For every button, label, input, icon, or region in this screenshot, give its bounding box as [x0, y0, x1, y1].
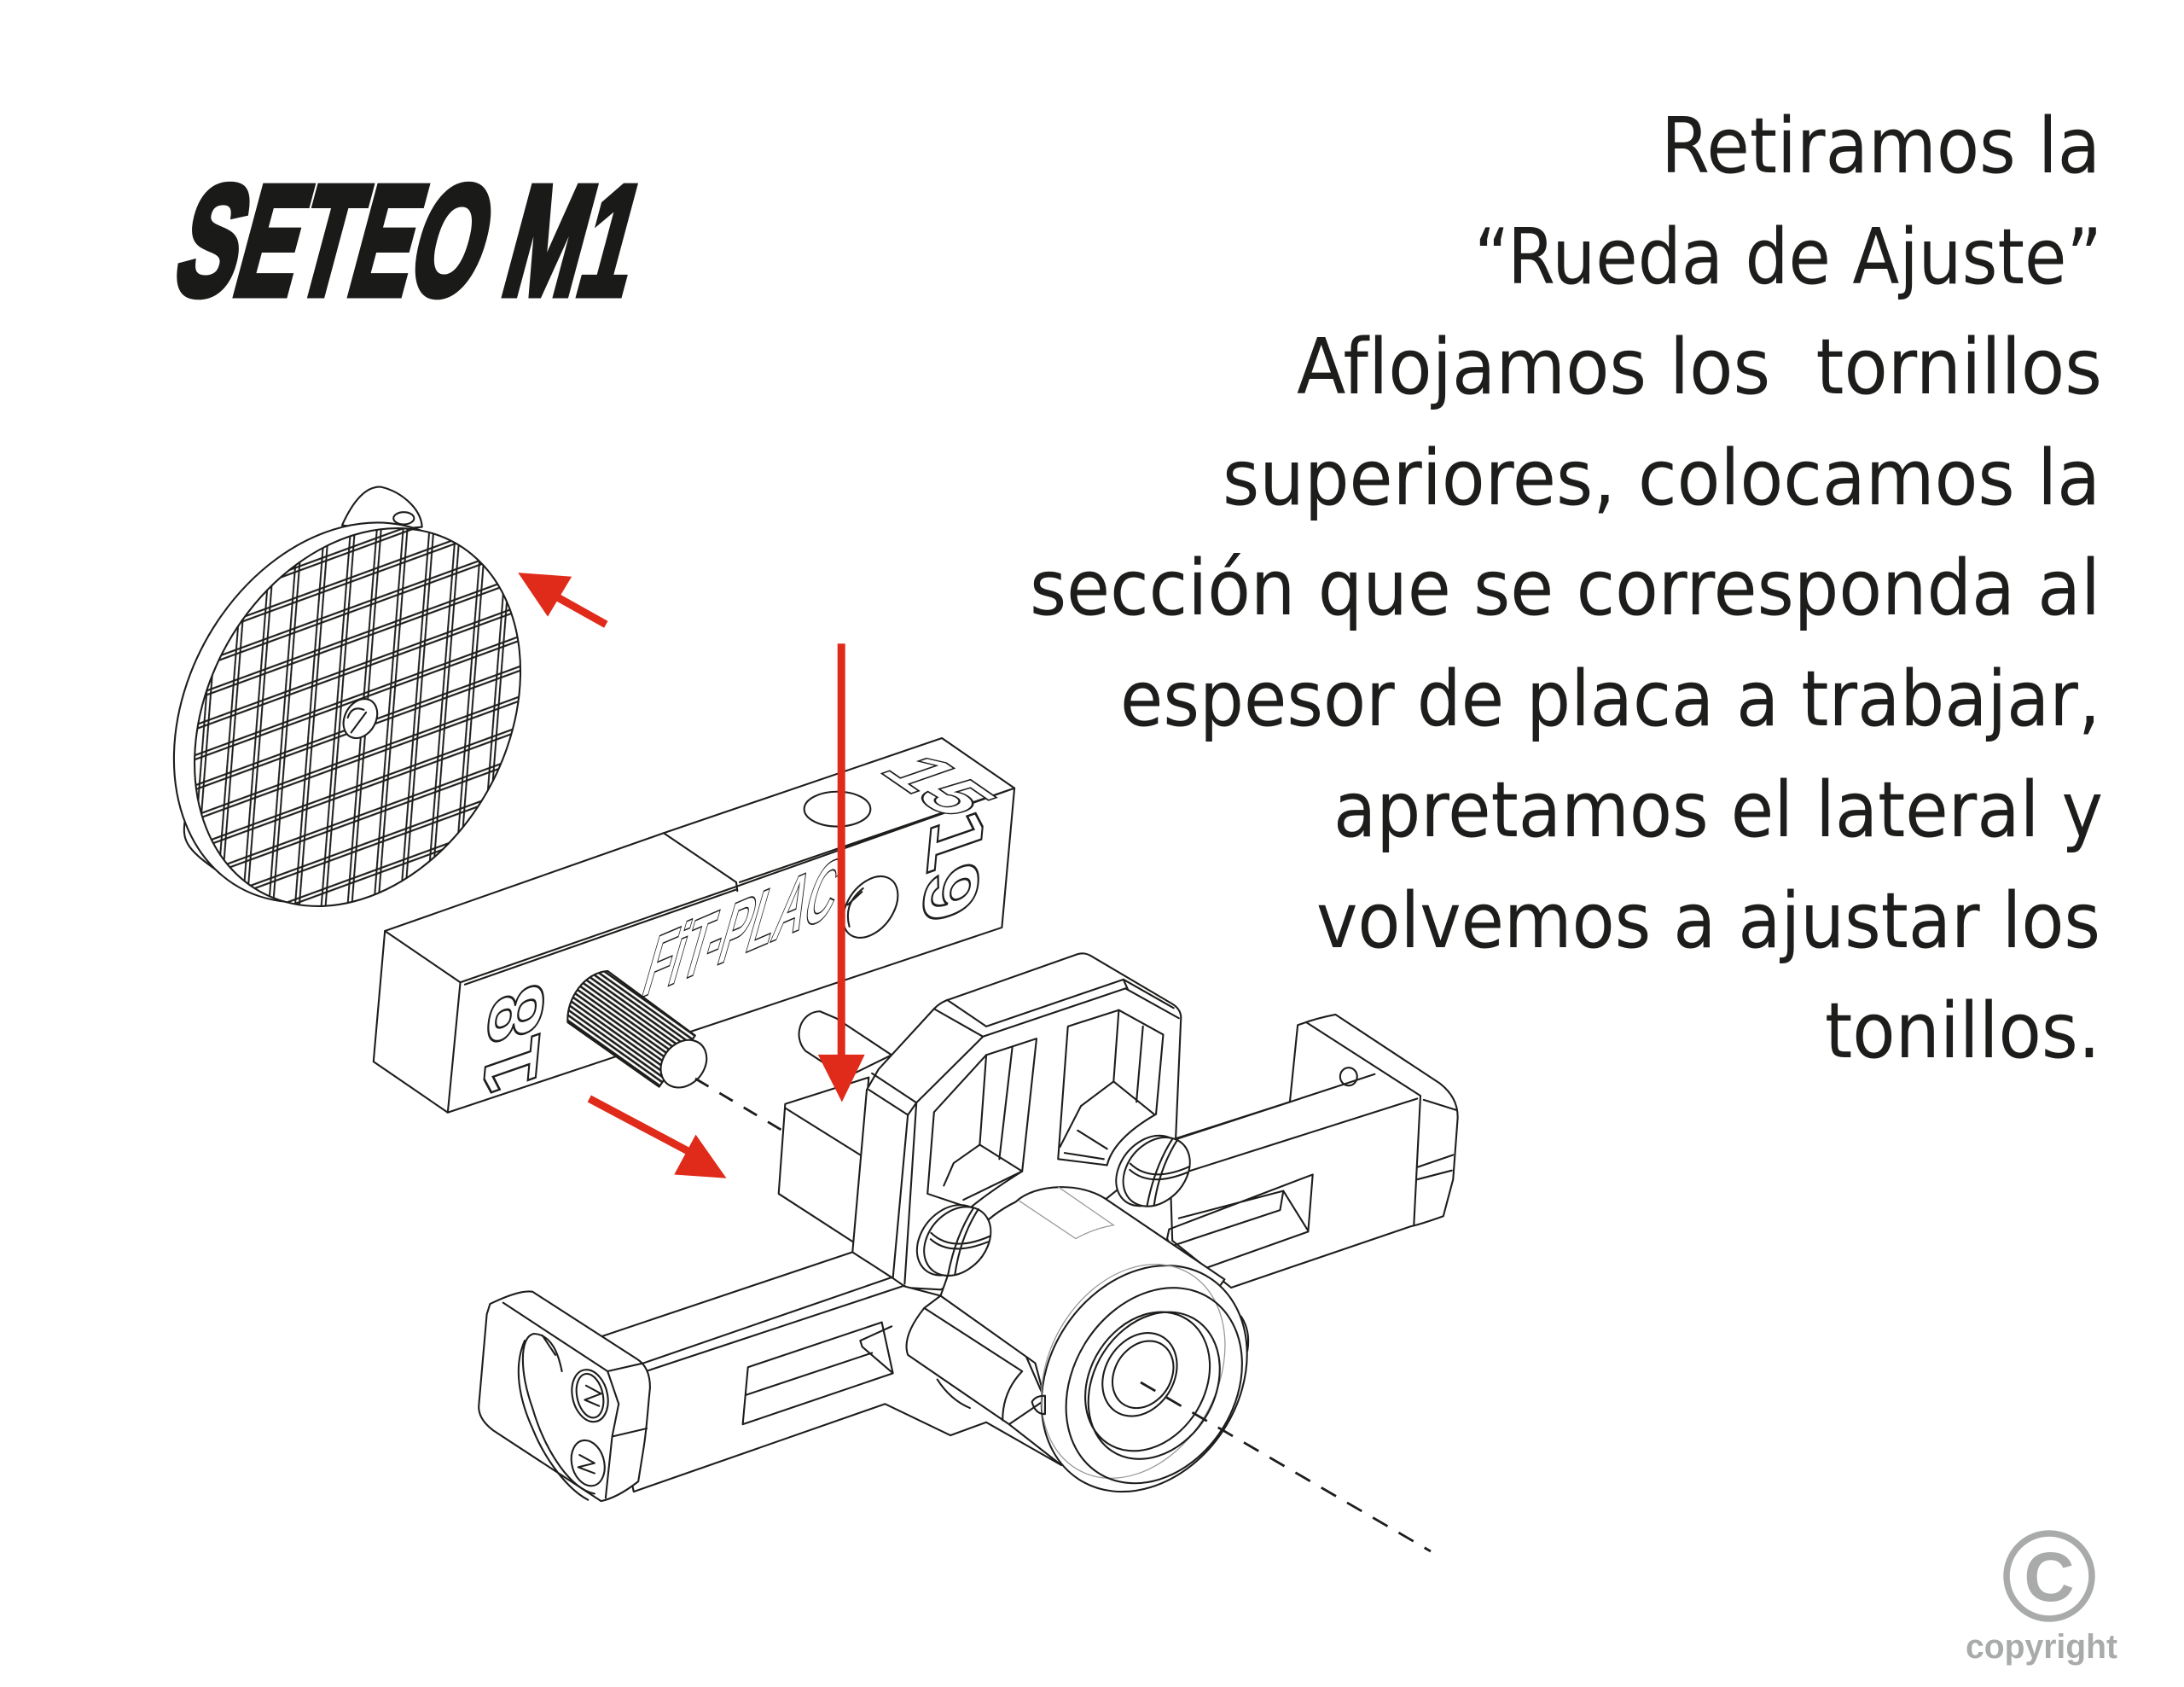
main body assembly: [479, 953, 1458, 1502]
right arm and end cap: [1167, 1015, 1458, 1288]
red arrow: remove wheel: [518, 573, 606, 625]
instructions text block: volvemos a ajustar los: [1316, 876, 2100, 966]
red arrow: remove pin: [590, 1098, 726, 1178]
instructions text block: sección que se corresponda al: [1030, 544, 2100, 633]
left bracket window: [927, 1038, 1037, 1208]
thickness gauge bar: FiT-PLAC: [634, 836, 854, 1018]
copyright symbol: [1966, 1533, 2117, 1666]
instructions text block: apretamos el lateral y: [1333, 765, 2103, 855]
front disc rings: [1015, 1255, 1274, 1502]
dashed axis line forward: [1141, 1382, 1431, 1551]
instructions text block: espesor de placa a trabajar,: [1120, 654, 2100, 744]
gauge number 15: 15: [862, 747, 1017, 824]
dashed axis line rear: [695, 1079, 784, 1131]
bracket frame: [852, 953, 1181, 1289]
title: SETEO M1: [160, 154, 660, 328]
top screw left: [906, 1201, 1002, 1281]
instructions text block: Aflojamos los tornillos: [1297, 323, 2102, 412]
right bracket window: [1058, 1010, 1163, 1165]
left arm: [601, 1252, 1061, 1492]
top screw right: [1106, 1131, 1201, 1212]
left end cap: [479, 1291, 650, 1501]
instructions text block: Retiramos la: [1661, 102, 2100, 191]
gauge number 18: 18: [466, 973, 561, 1108]
copyright symbol: copyright: [1966, 1628, 2117, 1666]
adjustment wheel: [123, 487, 572, 934]
instructions text block: superiores, colocamos la: [1223, 433, 2100, 523]
red arrow: insert section vertically: [818, 643, 865, 1102]
knurled pin: [567, 971, 714, 1092]
lock cylinder: [940, 1187, 1224, 1465]
instructions text block: tonillos.: [1825, 986, 2100, 1076]
thickness gauge bar: [374, 738, 1017, 1113]
gauge block in slot: [779, 1078, 868, 1242]
gauge number 19: 19: [905, 798, 1001, 934]
rear rod: [799, 1011, 892, 1078]
instructions text block: [1030, 102, 2103, 1076]
instructions text block: “Rueda de Ajuste”: [1474, 212, 2102, 302]
lower connector: [907, 1296, 1045, 1424]
copyright symbol: C: [2024, 1539, 2075, 1616]
